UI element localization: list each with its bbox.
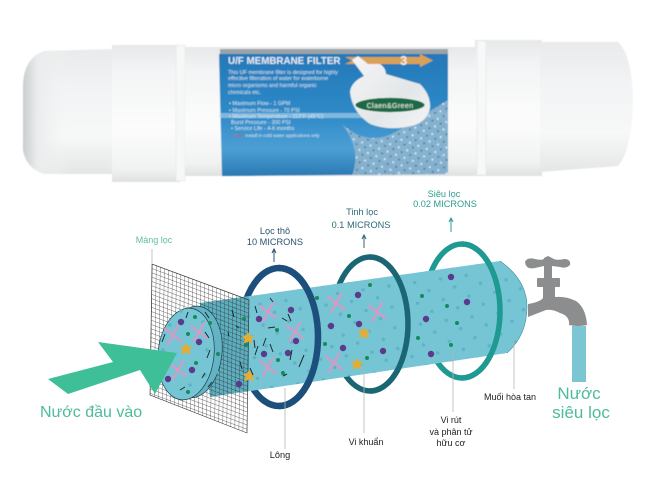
splash [342, 100, 448, 175]
specifications: • Maximum Flow - 1 GPM [229, 101, 291, 107]
specifications: • Service Life - 4-6 months [231, 126, 295, 132]
ring 3 back [424, 244, 500, 378]
description: This UF membrane filter is designed for highly [228, 70, 338, 76]
disc crosses [165, 323, 207, 379]
hair fibres [228, 298, 304, 376]
tube front disc [153, 303, 227, 403]
disc star [180, 343, 192, 354]
bacteria: purple dots [236, 274, 470, 387]
left end cap [23, 49, 115, 174]
leader: mesh [151, 249, 153, 263]
label: virus and organics: hữu cơ [437, 438, 466, 448]
label: coarse filtration: Lọc thô [260, 226, 290, 236]
disc purple dots [165, 319, 202, 382]
ring 3 front [462, 244, 500, 378]
ring 2 front [370, 257, 408, 391]
cartridge illustration [350, 56, 430, 128]
product label [219, 49, 448, 176]
ring 1 front [279, 268, 318, 406]
tube body [185, 47, 477, 176]
ring 1 back [240, 268, 318, 406]
badge ellipse [355, 98, 425, 112]
photo: U/F membrane filter cartridge [23, 40, 633, 182]
left collar [112, 45, 180, 182]
leader: hair [284, 388, 286, 449]
leader: dissolved salts [513, 340, 515, 389]
disc side [161, 303, 227, 401]
tube shaded part behind mesh [200, 296, 249, 397]
tube end edge [500, 261, 527, 353]
disc specks [161, 309, 221, 387]
badge text: Claen&Green [367, 101, 413, 110]
tube particles [228, 274, 470, 387]
splash droplets [342, 100, 448, 175]
label: ultra filtration: 0.02 MICRONS [413, 199, 477, 209]
Clean&Green badge [355, 98, 425, 112]
label top shadow [220, 49, 448, 54]
tube specks [200, 261, 527, 397]
gold arrow [345, 54, 433, 67]
tube [200, 261, 527, 397]
description: chrmicals etc. [228, 90, 261, 96]
label: coarse filtration: 10 MICRONS [247, 237, 303, 247]
label: ultra-filtered water: siêu lọc [552, 403, 610, 422]
label glare band [219, 113, 448, 118]
viruses: green dots [242, 283, 459, 375]
disc green dots [186, 315, 220, 394]
arrow number: 3 [400, 53, 407, 68]
faucet [525, 256, 587, 326]
specifications: • Maximum Temperature - 113°F (45°C) [229, 114, 324, 120]
faucet spout [528, 287, 587, 326]
label: mesh: Màng lọc [136, 235, 173, 245]
yellow stars [242, 327, 370, 382]
right collar [475, 40, 542, 176]
label: virus and organics: Vi rút [441, 415, 462, 425]
specifications: Burst Pressure - 300 PSI [231, 120, 291, 126]
arrow: fine filtration [362, 235, 366, 248]
label: ultra-filtered water: Nước [557, 384, 601, 403]
label: hair: Lông [270, 450, 290, 460]
pink crosses [260, 294, 385, 376]
label: bacteria: Vi khuẩn [349, 437, 383, 447]
label: ultra filtration: Siêu lọc [428, 189, 461, 199]
label: fine filtration: Tinh lọc [346, 207, 378, 217]
right ring [477, 41, 486, 175]
disc face [153, 305, 219, 403]
callouts [40, 189, 610, 460]
label: inlet water: Nước đầu vào [40, 404, 142, 421]
water stream [572, 326, 586, 382]
label title: U/F MEMBRANE FILTER [228, 56, 340, 67]
description: effective filteration of water for waterborne [228, 76, 328, 82]
disc fibres [162, 312, 212, 390]
left ring [176, 45, 185, 181]
specifications: • Maximum Pressure - 70 PSI [229, 108, 300, 114]
mesh screen [150, 264, 249, 433]
inlet arrow [48, 342, 177, 394]
arrow: ultra filtration [449, 218, 453, 232]
description: micro organisms and harmful organic [228, 83, 317, 89]
label: virus and organics: và phân tử [429, 427, 473, 437]
install note: Note: Install in cold water applications only [233, 133, 320, 138]
right end cap [540, 42, 633, 172]
leader: bacteria [363, 373, 365, 433]
label text [228, 56, 340, 138]
label: fine filtration: 0.1 MICRONS [332, 220, 390, 230]
leader: virus [452, 350, 454, 412]
ring 2 back [332, 257, 408, 391]
filtration diagram [40, 189, 610, 460]
label: dissolved salts: Muối hòa tan [484, 392, 536, 402]
faucet handle [525, 256, 570, 278]
faucet collar [537, 278, 560, 287]
left cap shading [23, 50, 70, 174]
arrow: coarse filtration [272, 249, 276, 262]
label background [219, 53, 448, 176]
